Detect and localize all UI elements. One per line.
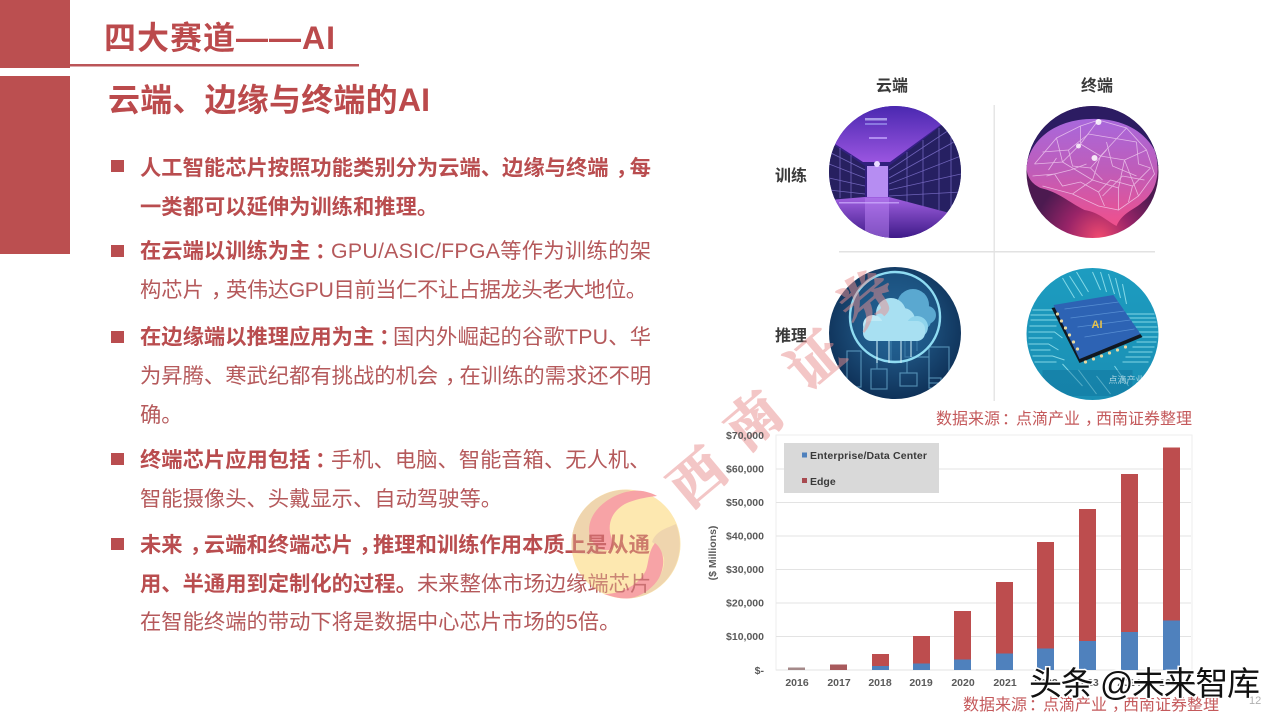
x axis labels: 2016 <box>785 677 809 689</box>
chart legend: Edge <box>810 476 836 488</box>
red diagonal watermark <box>650 249 910 522</box>
bullet 5: 推理和训练作用本质上是从通 <box>373 532 650 557</box>
row label: inference: 推理 <box>775 327 807 345</box>
quadrant figure <box>775 77 1158 401</box>
y axis labels: $30,000 <box>726 564 764 576</box>
bullet 3: 在训练的需求还不明 <box>460 364 651 388</box>
chart legend <box>784 443 939 493</box>
bullet 5: 在智能终端的带动下将是数据中心芯片市场的5倍。 <box>140 610 620 634</box>
bullet 5: ， <box>190 533 211 557</box>
icon: neural brain <box>1026 106 1158 238</box>
bullet 3: 国内外崛起的谷歌TPU、华 <box>393 325 651 349</box>
red diagonal watermark: 证 <box>768 311 859 405</box>
bullet 2: ： <box>315 239 336 263</box>
x axis labels: 2021 <box>993 677 1017 689</box>
bullet 2: ， <box>211 278 232 302</box>
y axis labels: $60,000 <box>726 464 764 476</box>
y axis title: ($ Millions) <box>707 526 719 580</box>
source note: figure: 西南证券整理 <box>1096 410 1192 428</box>
x axis labels: 2018 <box>868 677 892 689</box>
y axis labels: $50,000 <box>726 497 764 509</box>
bullet 2 <box>111 238 651 302</box>
x axis labels <box>785 677 1183 689</box>
red diagonal watermark: 券 <box>819 249 910 343</box>
red diagonal watermark: 西 <box>650 428 741 522</box>
y axis labels: $40,000 <box>726 530 764 542</box>
bullet 5: ， <box>359 533 380 557</box>
red side block <box>0 76 70 254</box>
icon: AI chip: 点滴产业 <box>1108 374 1145 385</box>
y axis labels <box>726 430 764 677</box>
bullet 3 <box>111 324 651 427</box>
bullet 1: 一类都可以延伸为训练和推理。 <box>140 194 438 219</box>
bullet 1 <box>111 156 651 219</box>
x axis labels: 2019 <box>909 677 933 689</box>
bullet 3: ： <box>379 325 400 349</box>
icon: cloud computing <box>829 267 961 399</box>
bullet 3: 在边缘端以推理应用为主 <box>140 325 374 349</box>
x axis labels: 2025 <box>1159 677 1183 689</box>
bullet 2: GPU/ASIC/FPGA等作为训练的架 <box>331 239 651 263</box>
bullet 3: 确。 <box>140 403 183 427</box>
chart legend: Enterprise/Data Center <box>810 450 927 462</box>
bullet 4 <box>111 447 650 511</box>
bullet 5: 用、半通用到定制化的过程。 <box>140 571 417 596</box>
row label: training: 训练 <box>775 166 807 185</box>
bullet 2: 在云端以训练为主 <box>140 239 310 263</box>
x axis labels: 2022 <box>1034 677 1058 689</box>
header rule <box>70 64 359 66</box>
x axis labels: 2017 <box>827 677 851 689</box>
title: 四大赛道——AI <box>104 20 335 56</box>
bullet 4: 终端芯片应用包括 <box>140 448 310 472</box>
source note: figure: ： <box>1002 411 1018 428</box>
bullet list <box>111 156 651 634</box>
source note: chart: 点滴产业 <box>1043 696 1107 714</box>
enterprise bars <box>872 620 1180 670</box>
icon: AI chip <box>1026 268 1158 400</box>
logo watermark <box>571 490 680 598</box>
icon: AI chip: AI <box>1092 319 1102 331</box>
bullet 3: 为昇腾、寒武纪都有挑战的机会 <box>140 364 438 388</box>
y axis labels: $20,000 <box>726 598 764 610</box>
source note: chart: 西南证券整理 <box>1123 696 1219 714</box>
icon: data center corridor <box>829 106 961 238</box>
bullet 1: ， <box>616 156 637 180</box>
bullet 4: ： <box>315 448 336 472</box>
edge bars <box>788 448 1180 670</box>
red diagonal watermark: 南 <box>706 371 797 465</box>
bullet 5 <box>111 532 651 634</box>
bullet 1: 每 <box>630 156 651 180</box>
source note: chart: 数据来源 <box>963 697 1027 714</box>
y axis labels: $- <box>755 665 764 677</box>
source note: figure: 数据来源 <box>936 411 1000 428</box>
x axis labels: 2020 <box>951 677 975 689</box>
x axis labels: 2023 <box>1075 677 1099 689</box>
source note: chart: ， <box>1112 697 1128 714</box>
bullet 2: 构芯片 <box>140 278 204 302</box>
source note: figure: 点滴产业 <box>1016 410 1080 428</box>
y axis labels: $70,000 <box>726 430 764 442</box>
publisher watermark: 头条 @未来智库 <box>1029 665 1260 702</box>
logo tint over text <box>571 490 680 598</box>
bullet 5: 云端和终端芯片 <box>204 533 353 557</box>
bullet 3: ， <box>445 364 466 388</box>
source note: chart: ： <box>1029 697 1045 714</box>
bullet 1: 人工智能芯片按照功能类别分为云端、边缘与终端 <box>140 156 609 180</box>
bullet 2: 英伟达GPU目前当仁不让占据龙头老大地位。 <box>226 278 647 302</box>
subtitle: 云端、边缘与终端的AI <box>108 82 430 118</box>
bullet 4: 智能摄像头、头戴显示、自动驾驶等。 <box>140 487 502 511</box>
stacked bar chart <box>707 430 1192 689</box>
page number: 12 <box>1249 695 1261 707</box>
column label: terminal: 终端 <box>1081 77 1113 95</box>
bullet 5: 未来 <box>140 533 183 557</box>
source note: figure: ， <box>1085 411 1101 428</box>
y axis labels: $10,000 <box>726 631 764 643</box>
bullet 5: 未来整体市场边缘端芯片 <box>417 572 651 596</box>
red header block <box>0 0 70 68</box>
bullet 4: 手机、电脑、智能音箱、无人机、 <box>331 448 650 472</box>
x axis labels: 2024 <box>1117 677 1141 689</box>
column label: cloud: 云端 <box>876 77 908 95</box>
